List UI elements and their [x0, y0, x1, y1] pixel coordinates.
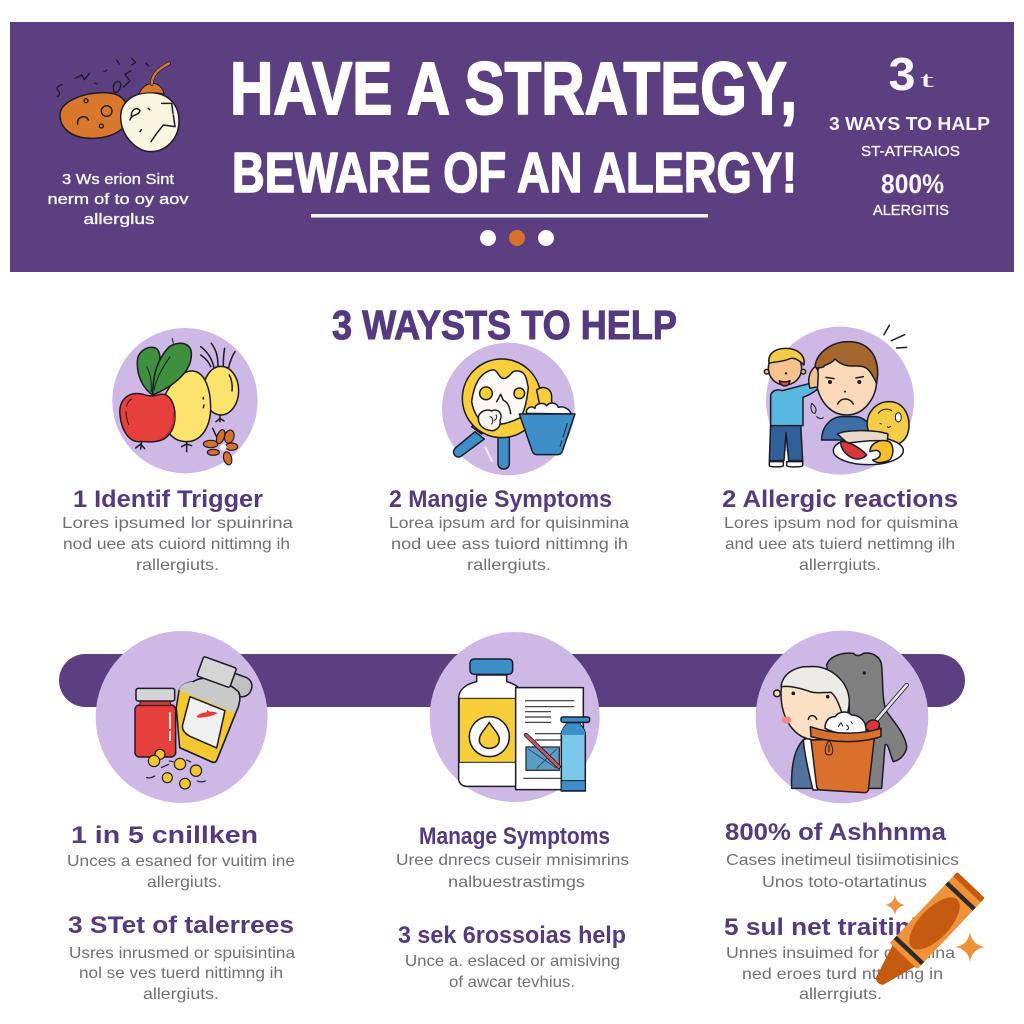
text block: set of tolerances: 3 STet of talerrees [68, 912, 294, 939]
text: left caption: nerm of to oy aov [48, 192, 189, 208]
text block: allergic reactions: Lores ipsum nod for quismina [724, 515, 958, 532]
text block: seek professional help: Unce a. eslaced or amisiving [405, 953, 620, 970]
text: right statistics: ST-ATFRAIOS [861, 144, 960, 160]
icon: medicine bottle and leaflet [430, 632, 600, 802]
text block: 80 percent of asthma: 800% of Ashhnma [725, 819, 947, 846]
text: left caption: allerglus [84, 212, 154, 228]
title [230, 47, 797, 205]
icon: medicine jars [96, 631, 268, 803]
text: right statistics: 3 [888, 48, 916, 100]
text block: manage symptoms summary: Uree dnrecs cuseir mnisimrins [396, 852, 629, 869]
title: BEWARE OF AN ALERGY! [232, 141, 797, 205]
text: left caption: 3 Ws erion Sint [62, 172, 174, 188]
panel: header banner [10, 22, 1014, 272]
title: HAVE A STRATEGY, [230, 47, 797, 130]
text block: set of tolerances [68, 912, 295, 1003]
text block: 1 in 5 children: allergiuts. [147, 874, 222, 891]
icon: elderly person with orange pot [756, 631, 928, 803]
text block: manage symptoms: nod uee ass tuiord nittimng ih [391, 536, 628, 553]
text block: set of tolerances: nol se ves tuerd nittimng ih [79, 965, 283, 982]
text block: manage symptoms summary: Manage Symptoms [419, 823, 610, 850]
timeline band [59, 654, 965, 707]
icon: children with allergic reaction [764, 325, 914, 475]
text block: 80 percent of asthma [725, 819, 959, 891]
text block: identify trigger: rallergiuts. [136, 557, 219, 574]
text: right statistics: 3 WAYS TO HALP [829, 114, 990, 134]
text block: training: Unnes insuimed for quismina [726, 945, 955, 962]
text block: set of tolerances: allergiuts. [143, 986, 219, 1003]
text block: 1 in 5 children [67, 822, 295, 891]
text: right statistics [829, 48, 990, 219]
text block: set of tolerances: Usres inrusmed or spuisintina [69, 945, 295, 962]
text block: seek professional help [398, 922, 626, 991]
text block: seek professional help: of awcar tevhius. [449, 974, 575, 991]
text block: 80 percent of asthma: Cases inetimeul tisiimotisinics [726, 852, 959, 869]
text block: training: ned eroes turd nttiming in [742, 966, 943, 983]
text: right statistics: ALERGITIS [873, 203, 949, 219]
text: right statistics: 800% [881, 169, 944, 199]
text block: seek professional help: 3 sek 6rossoias help [398, 922, 626, 949]
icon: magnifier and bowl [442, 343, 575, 475]
text block: 1 in 5 children: Unces a esaned for vuitim ine [67, 853, 295, 870]
text block: manage symptoms: 2 Mangie Symptoms [389, 486, 612, 513]
icon: orange crayon with sparkles [864, 872, 985, 996]
text block: identify trigger [62, 486, 293, 574]
text block: identify trigger: 1 Identif Trigger [73, 486, 263, 513]
carousel dots [480, 230, 554, 246]
text block: manage symptoms: rallergiuts. [467, 557, 551, 574]
text block: manage symptoms summary [396, 823, 629, 891]
title underline [311, 214, 708, 218]
text block: identify trigger: nod uee ats cuiord nittimng ih [63, 536, 290, 553]
text block: allergic reactions: and uee ats tuierd nettimng ilh [725, 536, 955, 553]
text block: training: 5 sul net traitining [724, 914, 950, 941]
text block: manage symptoms summary: nalbuestrastimgs [448, 874, 585, 891]
text block: training [724, 914, 955, 1003]
text block: 80 percent of asthma: Unos toto-otartatinus [762, 874, 927, 891]
icon: fruit and vegetables [112, 328, 258, 473]
text block: manage symptoms: Lorea ipsum ard for quisinmina [389, 515, 629, 532]
heading: 3 ways to help: 3 WAYSTS TO HELP [332, 302, 677, 348]
text block: identify trigger: Lores ipsumed lor spuinrina [62, 515, 293, 532]
text block: allergic reactions: 2 Allergic reactions [722, 486, 958, 513]
text block: allergic reactions: allerrgiuts. [799, 557, 881, 574]
text: right statistics: t [920, 67, 934, 92]
text block: manage symptoms [389, 486, 629, 574]
text: left caption [48, 172, 189, 228]
text block: allergic reactions [722, 486, 958, 574]
text block: 1 in 5 children: 1 in 5 cnillken [71, 822, 258, 849]
text block: training: allerrgiuts. [799, 986, 882, 1003]
icon: allergen foods [57, 58, 179, 152]
